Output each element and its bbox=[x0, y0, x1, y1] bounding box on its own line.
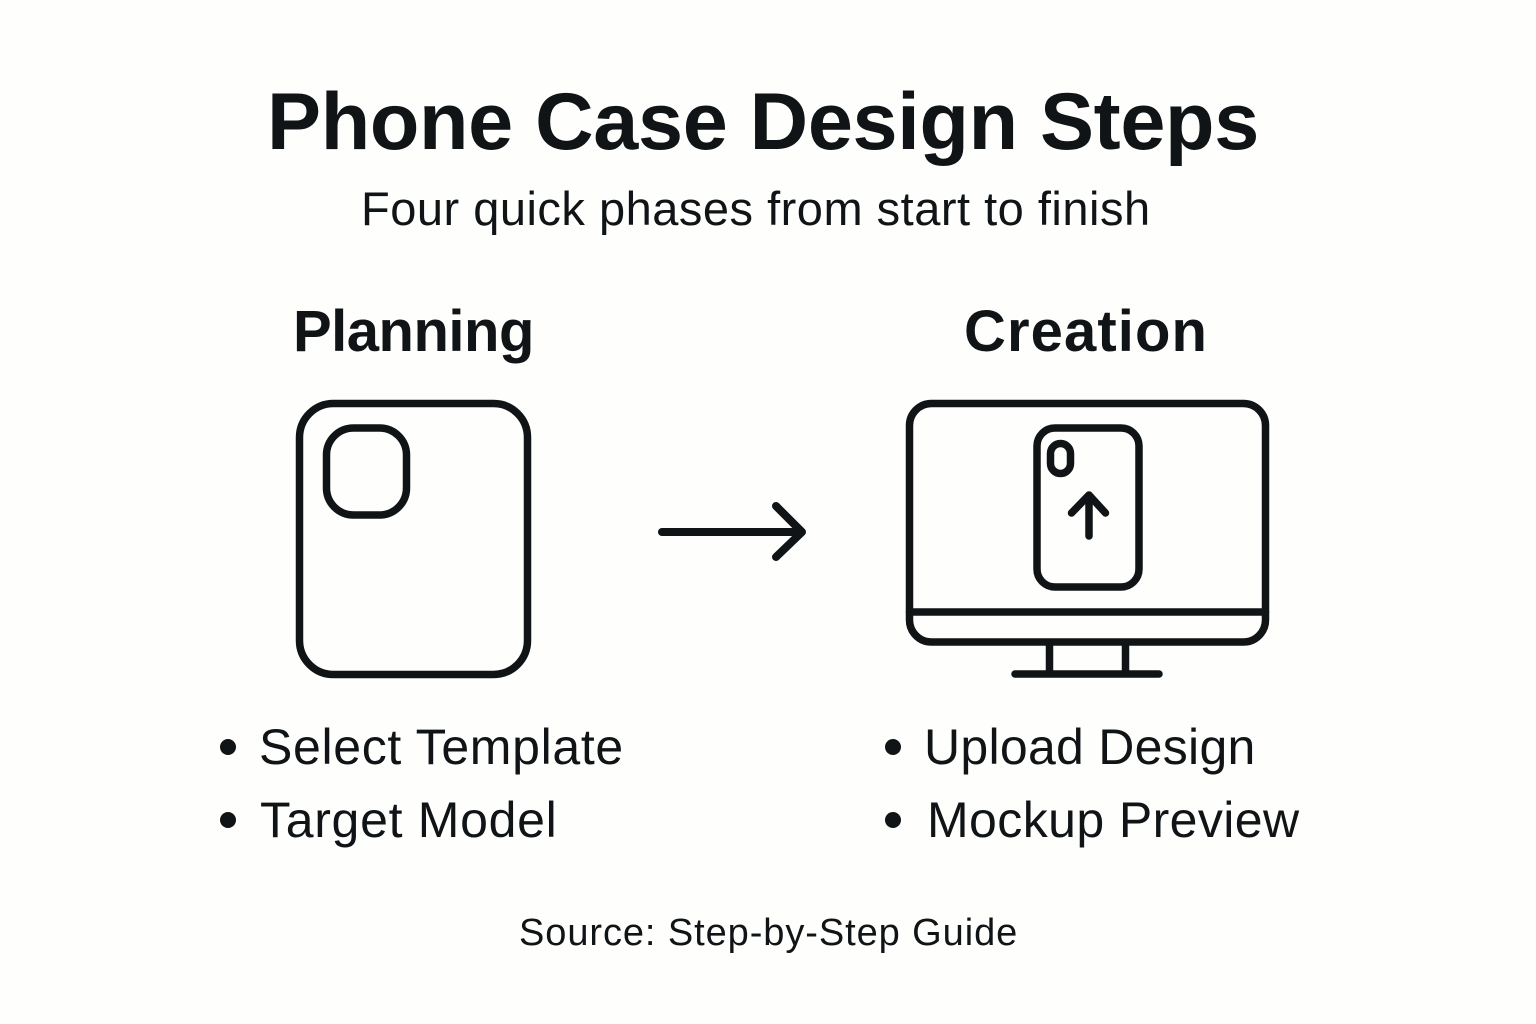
title: Phone Case Design Steps bbox=[267, 77, 1259, 167]
bullet: target model bbox=[220, 812, 236, 828]
heading: planning: Planning bbox=[293, 299, 534, 364]
text: target model: Target Model bbox=[260, 792, 557, 848]
heading: creation: Creation bbox=[964, 299, 1208, 364]
bullet: mockup preview bbox=[885, 812, 901, 828]
text: upload design: Upload Design bbox=[924, 719, 1256, 775]
source note: Source: Step-by-Step Guide bbox=[519, 912, 1018, 954]
bullet: upload design bbox=[885, 739, 901, 755]
text: select template: Select Template bbox=[259, 719, 624, 775]
bullet: select template bbox=[220, 739, 236, 755]
list: planning items bbox=[220, 719, 624, 848]
text: mockup preview: Mockup Preview bbox=[927, 792, 1300, 848]
subtitle: Four quick phases from start to finish bbox=[361, 182, 1151, 235]
list: creation items bbox=[885, 719, 1300, 848]
